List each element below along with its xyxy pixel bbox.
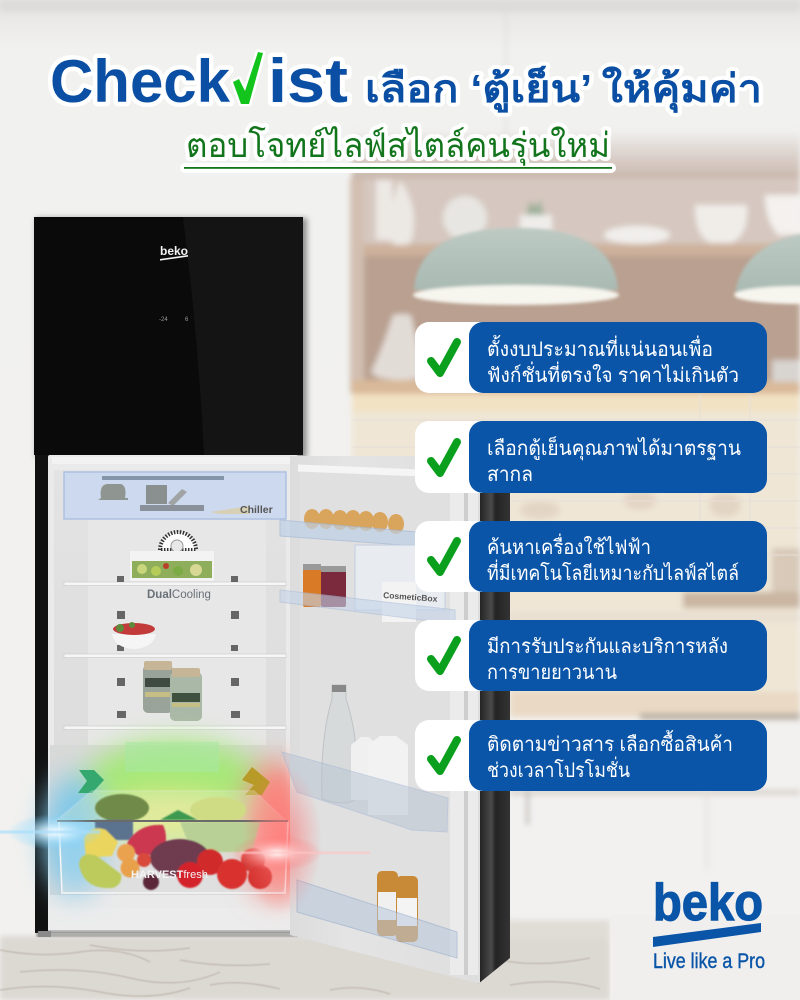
subtitle: ตอบโจทย์ไลฟ์สไตล์คนรุ่นใหม่ [186,126,610,166]
chiller drawer [64,472,286,519]
title thai: เลือก ‘ตู้เย็น’ ให้คุ้มค่า [365,65,762,113]
arrows [78,770,104,793]
door seal highlight [298,468,448,474]
checklist card 5 [415,720,767,791]
fridge: open refrigerator [0,217,510,984]
lamp: left pendant [413,228,619,305]
dualcooling label: DualCooling [147,589,211,601]
title [50,47,762,116]
temperature display: 6 [185,317,189,323]
check icon 3 [431,541,457,572]
open door [280,456,510,984]
fridge feet [38,931,309,937]
freezer door [34,217,307,458]
shelves [64,582,286,730]
fridge body [35,455,309,937]
card 1 text: ตั้งงบประมาณที่แน่นอนเพื่อ [487,335,713,361]
cosmetic box label: CosmeticBox [383,590,438,604]
eggs shelf [280,509,416,546]
crisper glow [45,740,307,900]
fan icon [160,532,196,552]
beko logo: beko [653,874,763,932]
harvest fresh drawer [56,791,288,893]
checklist card 2 [415,421,767,493]
spice jars and cosmetic box [280,545,455,624]
beko logo [653,874,765,973]
lamp: right pendant [734,233,800,304]
logo bar [653,923,761,947]
card 5 text: ติดตามข่าวสาร เลือกซื้อสินค้า [487,730,733,756]
check icon 2 [431,442,457,473]
checklist card 1 [415,322,767,393]
chiller label: Chiller [240,504,273,516]
checklist card 3 [415,521,767,592]
title check mark [233,52,263,104]
card 2 text: สากล [487,464,533,486]
card 3 text: ที่มีเทคโนโลยีเหมาะกับไลฟ์สไตล์ [487,559,739,585]
red side glow [242,765,322,915]
blue light flare [0,814,103,850]
bottle and milk cartons [282,685,448,832]
glass jars [143,661,202,721]
tagline: Live like a Pro [653,950,765,973]
harvest fresh label: HARVESTfresh [131,869,208,881]
check icon 1 [431,342,457,373]
check icon 5 [431,740,457,771]
check icon 4 [431,640,457,671]
card 1 text: ฟังก์ชั่นที่ตรงใจ ราคาไม่เกินตัว [487,361,739,387]
food box [130,551,214,581]
card 2 text: เลือกตู้เย็นคุณภาพได้มาตรฐาน [487,435,741,461]
checklist card 4 [415,620,767,691]
card 4 text: มีการรับประกันและบริการหลัง [487,636,728,658]
card 3 text: ค้นหาเครื่องใช้ไฟฟ้า [487,533,651,559]
red light flare [232,835,370,871]
floor wood grain [0,945,600,996]
temperature display [159,317,189,323]
beko mini logo: beko [160,244,188,258]
title word check: Check [50,48,231,115]
card 4 text: การขายยาวนาน [487,662,617,684]
bowl of strawberries [112,622,156,649]
temperature display: -24 [159,317,168,323]
vent slots [117,576,240,718]
card 5 text: ช่วงเวลาโปรโมชั่น [487,756,630,782]
juice bottles and bottom shelf [297,871,457,958]
title word ist: ist [268,47,348,116]
